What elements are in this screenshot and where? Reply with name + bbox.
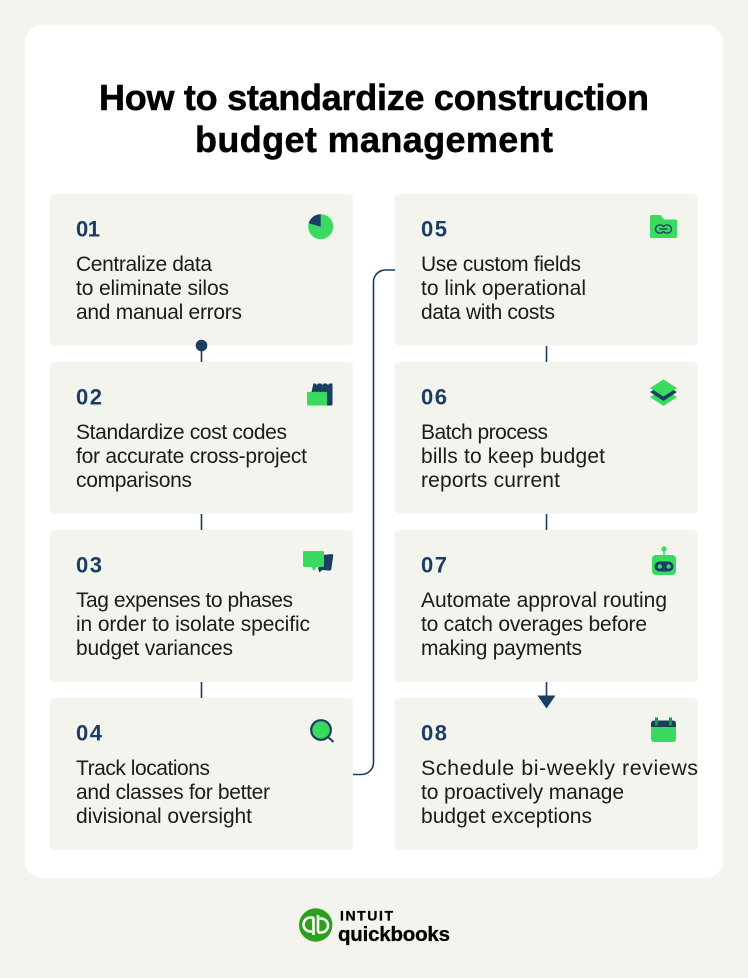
panel: step 02: Standardize cost codes	[76, 421, 287, 444]
panel: step 06	[395, 362, 698, 514]
panel: step 08	[395, 698, 698, 850]
panel: step 03: budget variances	[76, 637, 233, 660]
panel: step 04: Track locations	[76, 757, 210, 780]
panel: step 02: comparisons	[76, 469, 192, 492]
title: budget management	[195, 119, 553, 160]
icon: stacked layers	[650, 380, 677, 406]
panel: step 08: 08	[421, 720, 447, 746]
panel: step 03	[50, 530, 353, 682]
panel: step 02: 02	[76, 384, 102, 410]
icon: qb mark	[299, 908, 332, 942]
panel: step 08: budget exceptions	[421, 805, 592, 828]
panel: step 07	[395, 530, 698, 682]
panel: step 04	[50, 698, 353, 850]
panel: step 06: bills to keep budget	[421, 445, 605, 468]
logo: Intuit QuickBooks: quickbooks	[338, 923, 450, 946]
icon: folder with link	[650, 215, 677, 238]
panel: step 04: 04	[76, 720, 103, 746]
panel: step 02: for accurate cross-project	[76, 445, 307, 468]
panel: step 06: reports current	[421, 469, 560, 492]
arrow: 07 to 08	[538, 682, 556, 708]
icon: magnifying glass	[311, 720, 334, 742]
panel: step 05: Use custom fields	[421, 253, 581, 276]
icon: robot	[652, 546, 676, 575]
logo: Intuit QuickBooks	[299, 908, 450, 946]
panel: step 04: and classes for better	[76, 781, 270, 804]
panel: step 05: to link operational	[421, 277, 586, 300]
panel: step 08: Schedule bi-weekly reviews	[421, 756, 698, 780]
panel: step 04: divisional oversight	[76, 805, 252, 828]
panel: step 03: Tag expenses to phases	[76, 589, 293, 612]
panel: step 01: and manual errors	[76, 301, 242, 324]
icon: calendar	[651, 718, 676, 742]
panel: step 05	[395, 194, 698, 346]
panel: step 07: Automate approval routing	[421, 589, 667, 612]
logo: Intuit QuickBooks: INTUIT	[340, 908, 393, 924]
panel: step 01: 01	[76, 216, 100, 242]
panel: step 05: data with costs	[421, 301, 555, 324]
icon: speech bubbles	[303, 551, 333, 572]
connector: 01 to 02 with dot	[196, 340, 207, 362]
panel: step 06: Batch process	[421, 421, 548, 444]
panel: step 01	[50, 194, 353, 346]
panel: step 03: in order to isolate specific	[76, 613, 310, 636]
title: How to standardize construction	[99, 77, 649, 118]
title	[99, 77, 649, 160]
panel: step 02	[50, 362, 353, 514]
panel: step 01: to eliminate silos	[76, 277, 229, 300]
panel: step 08: to proactively manage	[421, 781, 624, 804]
panel: step 06: 06	[421, 384, 447, 410]
connector: 04 to 05	[353, 270, 395, 774]
panel: step 05: 05	[421, 216, 447, 242]
connector: 02 to 03	[200, 514, 202, 530]
connector: 05 to 06	[546, 346, 548, 362]
panel: step 01: Centralize data	[76, 253, 212, 276]
panel: step 07: 07	[421, 552, 447, 578]
icon: factory blocks	[307, 384, 332, 406]
icon: pie chart	[308, 214, 333, 239]
panel: step 07: making payments	[421, 637, 582, 660]
connector: 03 to 04	[200, 682, 202, 698]
panel: step 07: to catch overages before	[421, 613, 647, 636]
panel: step 03: 03	[76, 552, 102, 578]
connector: 06 to 07	[546, 514, 548, 530]
